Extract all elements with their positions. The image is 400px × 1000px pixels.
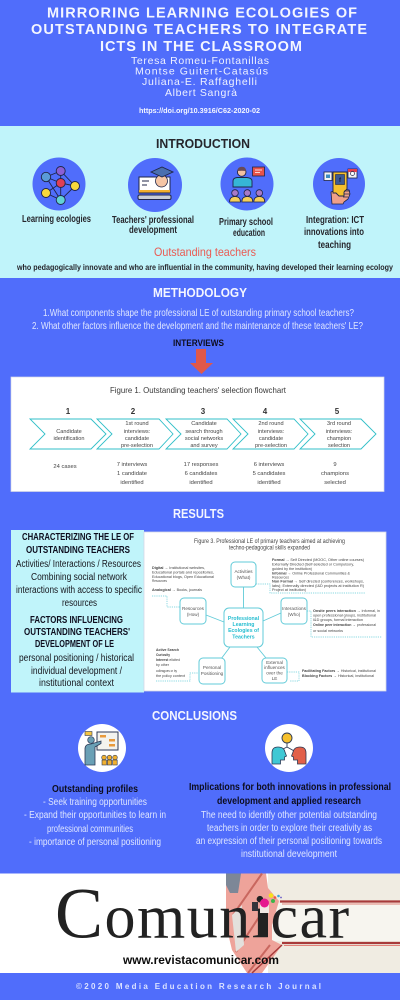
- external influences notes: Blocking Factors → Historical, institutional: [302, 674, 374, 678]
- step results: 1 candidate: [117, 471, 147, 477]
- panel: results text: [11, 530, 144, 692]
- factors influencing development: institutional context: [39, 678, 114, 689]
- activities notes: labs); Externally directed (I&D projects at institution R): [272, 584, 364, 588]
- activities notes: Project at institution): [272, 588, 306, 592]
- box labels: (How): [187, 612, 200, 617]
- text: outstanding profiles: professional communities: [47, 824, 133, 835]
- text: outstanding profiles: - Expand their opportunities to learn in: [24, 810, 166, 821]
- text: implications: institutional development: [241, 849, 337, 860]
- box labels: Resources: [182, 606, 205, 611]
- personal positioning notes: colleagues or by: [156, 669, 177, 673]
- label: primary school education: Primary school: [219, 217, 273, 228]
- text: outstanding profiles: - importance of personal positioning: [29, 837, 161, 848]
- text: implications: development and applied research: [217, 796, 361, 807]
- resources notes: [152, 566, 214, 592]
- activities notes: [272, 558, 364, 592]
- chevron labels: champion: [327, 436, 351, 442]
- diagram boxes: [180, 562, 307, 684]
- external influences notes: Facilitating Factors → Historical, institutional: [302, 669, 376, 673]
- label: ICT integration: Integration: ICT: [306, 215, 364, 226]
- box labels: [182, 569, 307, 681]
- central box label: Teachers: [232, 634, 255, 640]
- factors influencing development: FACTORS INFLUENCING: [30, 615, 123, 626]
- icon: presenter with audience: [78, 724, 126, 772]
- text: outstanding profiles: - Seek training opportunities: [43, 797, 147, 808]
- activities notes: guided by the institution): [272, 567, 312, 571]
- introduction background: [0, 126, 400, 278]
- box labels: (What): [237, 575, 251, 580]
- personal positioning notes: Active Search: [156, 648, 179, 652]
- icon: ICT integration phone: f: [339, 178, 342, 184]
- activities notes: Formal → Self Directed (MOOC, Other online courses): [272, 558, 364, 562]
- authors: Teresa Romeu-Fontanillas: [131, 55, 269, 67]
- text: outstanding profiles: Outstanding profiles: [52, 784, 138, 795]
- chevron labels: interviews:: [326, 429, 353, 435]
- personal positioning notes: Interest elicited: [156, 658, 180, 662]
- chevron labels: social networks: [185, 436, 223, 442]
- step results: identified: [120, 480, 144, 486]
- activities notes: Resources: [272, 576, 289, 580]
- header: title, authors and DOI: [31, 6, 367, 115]
- results text background: [11, 530, 144, 692]
- step results: 9: [333, 462, 337, 468]
- arrow: down to flowchart: [190, 349, 213, 374]
- step numbers: 3: [201, 407, 206, 416]
- chevron labels: identification: [53, 436, 85, 442]
- chevron labels: Candidate: [191, 421, 217, 427]
- connector lines: [206, 587, 281, 659]
- section: conclusions: [24, 708, 391, 860]
- authors: Montse Guitert-Catasús: [135, 66, 268, 78]
- text: outstanding profiles: [24, 784, 166, 848]
- chevron labels: and survey: [190, 443, 218, 449]
- chevron labels: search through: [185, 429, 223, 435]
- step results: champions: [321, 471, 349, 477]
- box labels: Positioning: [201, 671, 224, 676]
- label: primary school education: [219, 217, 273, 239]
- diagram background: [144, 532, 386, 691]
- chevron labels: candidate: [259, 436, 283, 442]
- step numbers: 5: [335, 407, 340, 416]
- box labels: (Who): [288, 612, 301, 617]
- activities notes: Externally Directed (Self-selected or Compulsory,: [272, 562, 354, 566]
- resources notes: Digital → Institutional websites,: [152, 566, 205, 570]
- panel: introduction: [0, 126, 400, 278]
- diagram title: [194, 538, 345, 552]
- chevron labels: 1st round: [125, 421, 149, 427]
- heading: results: RESULTS: [173, 506, 224, 521]
- personal positioning notes: [156, 648, 185, 678]
- chevron labels: interviews:: [258, 429, 285, 435]
- title: [31, 6, 367, 55]
- label: teachers' professional development: Teachers' professional: [112, 215, 194, 226]
- research questions: [32, 308, 363, 332]
- subheading: outstanding teachers: Outstanding teachers: [154, 245, 256, 259]
- interactions notes: Online peer interaction → professional: [313, 623, 376, 627]
- step numbers: 2: [131, 407, 136, 416]
- central box label: Professional: [228, 616, 260, 622]
- step results: 17 responses: [184, 462, 218, 468]
- factors influencing development: DEVELOPMENT OF LE: [35, 639, 114, 650]
- dotted callout lines: [152, 584, 382, 681]
- chevrons: [30, 419, 376, 449]
- heading: methodology: METHODOLOGY: [153, 285, 247, 300]
- chevron labels: interviews:: [124, 429, 151, 435]
- factors influencing development: personal positioning / historical: [19, 653, 134, 664]
- label: ICT integration: innovations into: [304, 227, 364, 238]
- copyright line: ©2020 Media Education Research Journal: [76, 982, 321, 991]
- box labels: LE: [272, 676, 277, 681]
- chevron labels: [53, 421, 353, 449]
- diagram title: techno-pedagogical skills expanded: [229, 544, 310, 552]
- label: ICT integration: [304, 215, 364, 251]
- chevron labels: Candidate: [56, 429, 82, 435]
- resources notes: Educational blogs, Open Educational: [152, 575, 214, 579]
- books photograph: [226, 874, 400, 973]
- personal positioning notes: by other: [156, 663, 170, 667]
- central box label: [228, 616, 260, 640]
- section: results: [11, 506, 386, 692]
- factors influencing development: individual development /: [31, 666, 122, 677]
- interactions notes: Onsite peers interaction → informal, in: [313, 609, 380, 613]
- icon: teachers' professional development: [128, 158, 182, 212]
- resources notes: Analogical → Books, journals: [152, 588, 202, 592]
- step results: 7 interviews: [117, 462, 147, 468]
- step numbers: 1: [66, 407, 71, 416]
- icon: ICT integration phone: [313, 158, 365, 210]
- title: ICTS IN THE CLASSROOM: [100, 39, 302, 55]
- step results: 6 interviews: [254, 462, 284, 468]
- central box label: Learning: [233, 622, 254, 628]
- box labels: Interactions: [282, 606, 307, 611]
- text: implications: [189, 782, 391, 860]
- personal positioning notes: Curiosity: [156, 653, 170, 657]
- label: interviews: INTERVIEWS: [173, 338, 224, 348]
- section: methodology: [11, 285, 384, 492]
- label: learning ecologies: Learning ecologies: [22, 214, 91, 225]
- label: teachers' professional development: [112, 215, 194, 236]
- step numbers: [66, 407, 340, 416]
- icon: learning ecologies network: [32, 158, 86, 210]
- step results: [53, 462, 349, 486]
- characterizing the LE: Combining social network: [31, 572, 128, 583]
- heading: conclusions: CONCLUSIONS: [152, 708, 237, 723]
- chevron labels: 3rd round: [327, 421, 351, 427]
- resources notes: Resources: [152, 579, 167, 583]
- interactions notes: I&D groups, formal interaction: [313, 618, 363, 622]
- DOI link: https://doi.org/10.3916/C62-2020-02: [139, 106, 260, 115]
- flowchart background: [11, 377, 384, 492]
- website: www.revistacomunicar.com: [122, 953, 279, 967]
- step results: selected: [324, 480, 346, 486]
- central box label: Ecologies of: [228, 628, 259, 634]
- label: ICT integration: teaching: [318, 240, 351, 251]
- characterizing the LE: resources: [62, 598, 97, 609]
- label: primary school education: education: [233, 228, 265, 239]
- flowchart title: Figure 1. Outstanding teachers' selection flowchart: [110, 385, 287, 395]
- chevron labels: 2nd round: [258, 421, 284, 427]
- figure 1: selection flowchart: [11, 377, 384, 492]
- characterizing the LE: [16, 532, 142, 609]
- interactions notes: or social networks: [313, 629, 343, 633]
- title: OUTSTANDING TEACHERS TO INTEGRATE: [31, 22, 367, 38]
- interactions notes: [313, 609, 380, 633]
- chevron labels: candidate: [125, 436, 149, 442]
- step results: 24 cases: [53, 464, 77, 470]
- external influences notes: [302, 669, 376, 678]
- resources notes: Educational portals and repositories,: [152, 570, 214, 574]
- banner background: [0, 874, 400, 973]
- activities notes: Non Formal → Self directed (conferences, workshops,: [272, 580, 364, 584]
- chevron labels: pre-selection: [121, 443, 153, 449]
- characterizing the LE: CHARACTERIZING THE LE OF: [22, 532, 134, 543]
- chevron labels: pre-selection: [255, 443, 287, 449]
- step results: identified: [189, 480, 213, 486]
- icon: primary school education: [220, 158, 274, 210]
- box labels: External: [266, 660, 283, 665]
- box labels: Activities: [234, 569, 253, 574]
- characterizing the LE: Activities/ Interactions / Resources: [16, 559, 141, 570]
- box labels: over the: [266, 670, 283, 676]
- footer: journal banner: [0, 874, 400, 973]
- authors: [131, 55, 269, 99]
- authors: Juliana-E. Raffaghelli: [142, 76, 257, 88]
- step results: 5 candidates: [253, 471, 286, 477]
- logo: i mark and coloured dots: [252, 893, 282, 937]
- personal positioning notes: the policy context: [156, 674, 185, 678]
- title: MIRRORING LEARNING ECOLOGIES OF: [47, 6, 357, 22]
- diagram title: Figure 3. Professional LE of primary teachers aimed at achieving: [194, 538, 345, 545]
- figure 3: professional LE diagram: [144, 532, 386, 691]
- activities notes: Informal → Online Professional Communities &: [272, 572, 351, 576]
- step results: identified: [257, 480, 281, 486]
- interactions notes: open professional groups, institutional: [313, 614, 376, 618]
- factors influencing development: OUTSTANDING TEACHERS': [24, 627, 130, 638]
- step numbers: 4: [263, 407, 268, 416]
- heading: introduction: INTRODUCTION: [156, 136, 250, 151]
- step results: 6 candidates: [185, 471, 218, 477]
- characterizing the LE: OUTSTANDING TEACHERS: [26, 545, 130, 556]
- logo: Comunicar: Comunicar: [55, 874, 351, 954]
- icon: two heads and idea bulb: [265, 724, 313, 772]
- label: teachers' professional development: development: [129, 225, 178, 236]
- box labels: influences: [264, 665, 286, 670]
- chevron labels: selection: [328, 443, 350, 449]
- characterizing the LE: interactions with access to specific: [16, 585, 142, 596]
- box labels: Personal: [203, 665, 221, 670]
- authors: Albert Sangrà: [165, 87, 237, 99]
- factors influencing development: [19, 615, 134, 689]
